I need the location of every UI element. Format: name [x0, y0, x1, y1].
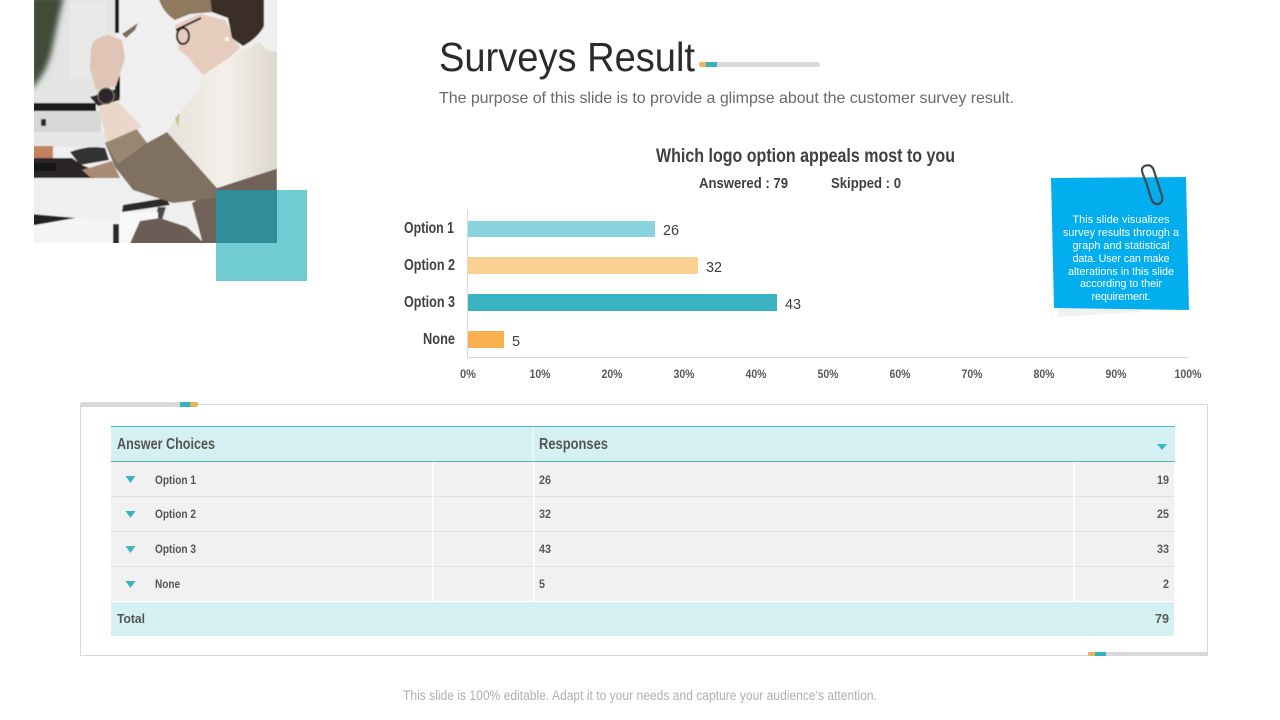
arm and hand	[98, 102, 142, 142]
x axis labels: 30%	[674, 367, 695, 381]
x axis labels: 60%	[890, 367, 911, 381]
table frame	[80, 402, 1208, 656]
row: Option 1	[126, 473, 1169, 487]
face and neck	[175, 14, 240, 77]
row: Option 3: Option 3	[155, 542, 196, 556]
sticky note text	[1063, 214, 1179, 303]
row: Option 3: 43	[539, 542, 551, 556]
row: None: 5	[539, 577, 545, 591]
keyboard and desk	[34, 132, 106, 146]
photo: woman at desk with pen	[30, 0, 282, 248]
table row backgrounds	[111, 462, 1174, 601]
row: Total: 79	[1155, 611, 1169, 626]
footer note: This slide is 100% editable. Adapt it to your needs and capture your audience's attention.	[403, 688, 877, 703]
sticky note text: alterations in this slide	[1068, 266, 1174, 278]
sticky note callout	[1051, 165, 1189, 317]
sticky note text: according to their	[1080, 278, 1162, 290]
icon: paperclip	[1142, 165, 1162, 204]
row: Total: Total	[117, 611, 145, 626]
bar: Option 3: Option 3	[404, 294, 455, 311]
x axis labels: 70%	[962, 367, 983, 381]
row: Total	[111, 602, 1174, 636]
x axis labels	[460, 367, 1202, 381]
table header row: Responses	[539, 436, 608, 453]
row: Option 1: Option 1	[155, 473, 196, 487]
sleeve	[105, 127, 217, 203]
x axis labels: 10%	[530, 367, 551, 381]
row: Option 3	[126, 542, 1169, 556]
sweater	[167, 42, 282, 188]
x axis labels: 0%	[460, 367, 476, 381]
row: Option 2	[126, 507, 1169, 521]
row: None	[126, 577, 1169, 591]
table header row: Answer Choices	[117, 436, 215, 453]
x axis labels: 80%	[1034, 367, 1055, 381]
bar: None: 5	[512, 334, 520, 350]
row: None: 2	[1163, 577, 1169, 591]
bar: None	[423, 331, 520, 350]
sticky note text: requirement.	[1092, 291, 1150, 303]
row: Option 2: 32	[539, 507, 551, 521]
bar: Option 2: 32	[706, 260, 722, 276]
skipped count: Skipped : 0	[831, 175, 901, 192]
bar: None: None	[423, 331, 455, 348]
bar: Option 1	[404, 220, 679, 239]
subtitle: The purpose of this slide is to provide a glimpse about the customer survey result.	[439, 90, 1014, 107]
glasses	[176, 18, 201, 30]
bar: Option 2: Option 2	[404, 257, 455, 274]
sticky note text: This slide visualizes	[1072, 214, 1170, 226]
row: Option 2: Option 2	[155, 507, 196, 521]
row: Option 2: 25	[1157, 507, 1169, 521]
hair	[210, 0, 265, 46]
paper	[34, 177, 122, 183]
bar: Option 3: 43	[785, 297, 801, 313]
x axis labels: 90%	[1106, 367, 1127, 381]
monitor	[30, 0, 115, 104]
sticky note text: data. User can make	[1072, 253, 1170, 265]
x axis labels: 40%	[746, 367, 767, 381]
table header row	[111, 426, 1175, 462]
sticky note text: survey results through a	[1063, 227, 1179, 239]
chart axes	[468, 210, 1188, 358]
row: Option 1: 19	[1157, 473, 1169, 487]
row: Option 3: 33	[1157, 542, 1169, 556]
lap	[130, 218, 204, 243]
sticky note text: graph and statistical	[1072, 240, 1170, 252]
title: Surveys Result	[439, 34, 696, 80]
lower body	[192, 168, 277, 248]
bar: Option 2	[404, 257, 722, 276]
bar chart	[404, 210, 1202, 381]
bar: Option 1: Option 1	[404, 220, 454, 237]
bar: Option 1: 26	[663, 223, 679, 239]
row: None: None	[155, 577, 180, 591]
teal overlay squares	[216, 190, 307, 281]
row: Option 1: 26	[539, 473, 551, 487]
chart heading: Which logo option appeals most to you	[656, 145, 955, 167]
survey table	[111, 426, 1175, 636]
title accent bar	[699, 62, 820, 67]
bar: Option 3	[404, 294, 801, 313]
x axis labels: 100%	[1174, 367, 1202, 381]
answered count: Answered : 79	[699, 175, 788, 192]
x axis labels: 20%	[602, 367, 623, 381]
x axis labels: 50%	[818, 367, 839, 381]
